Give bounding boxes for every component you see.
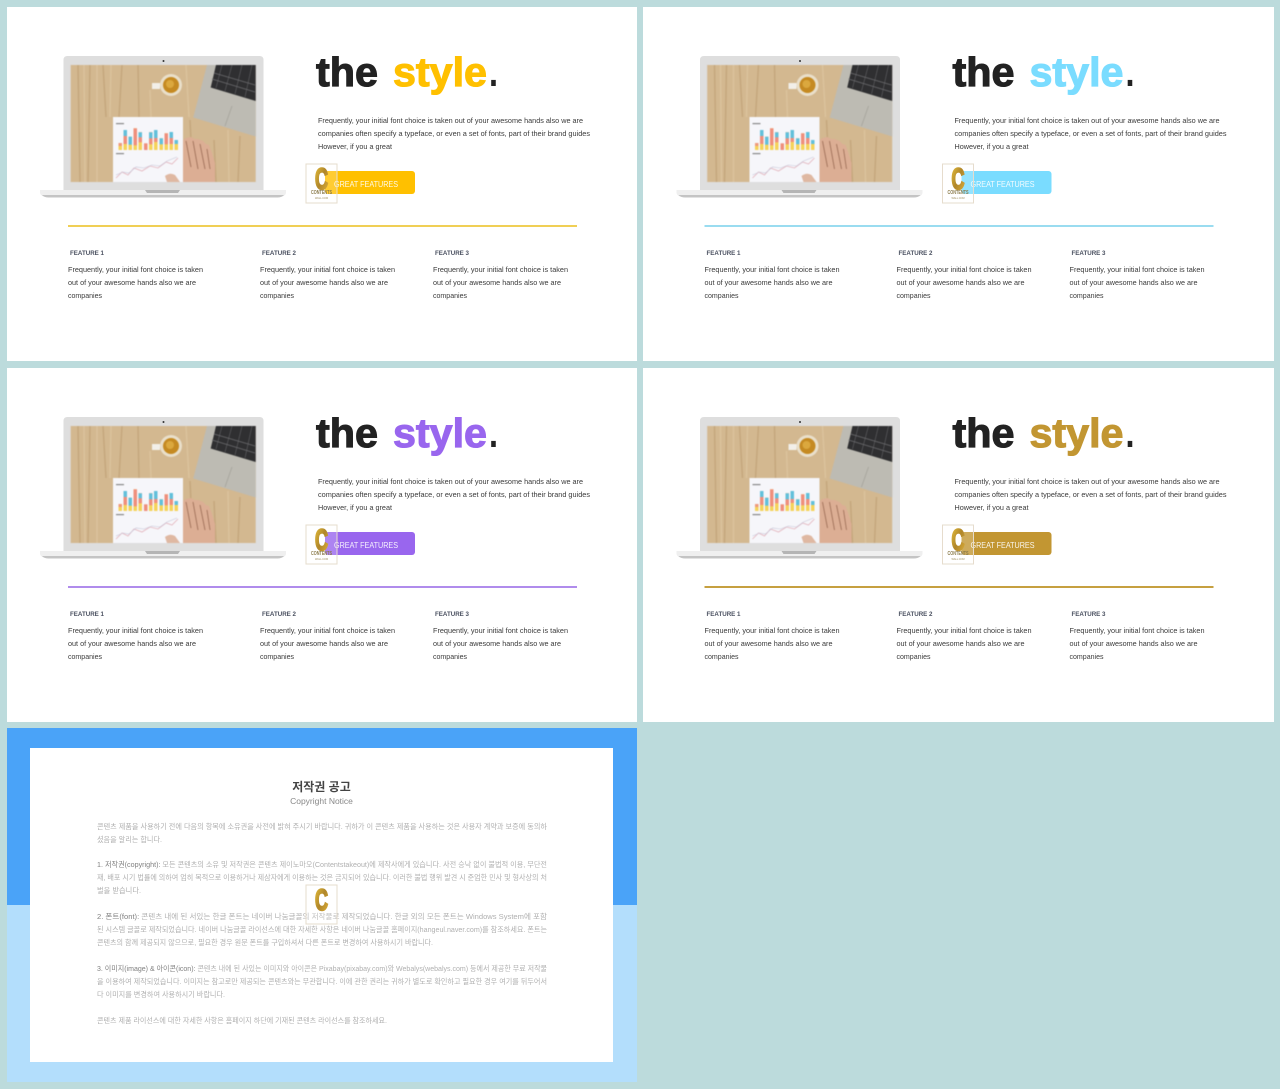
watermark logo [942,163,974,203]
laptop mockup with desk photo [40,417,286,558]
feature 3 [1070,611,1204,661]
paragraph 3: image and icon: 다 이미지를 변경하여 사용하시기 바랍니다. [97,989,225,999]
feature 2: FEATURE 2 [898,611,933,618]
watermark logo: CONTENTS [948,551,969,557]
intro text: Frequently, your initial font choice is taken out of your awesome hands also we are [318,477,583,486]
paragraph 1: copyright: 1. 저작권(copyright): 모든 콘텐츠의 소유 및 저작권은 콘텐츠 제이노마오(Contentstakeout)에 제작사에게 있습니다. 사전 승낙 없이 불법적 이용, 무단전 [97,859,547,869]
feature 3: out of your awesome hands also we are [1070,639,1198,648]
watermark logo: C [315,163,328,196]
watermark logo: WALL.COM [952,196,965,200]
panel: yellow slide [7,7,637,361]
watermark logo: WALL.COM [315,557,328,561]
feature 2 [896,611,1032,661]
feature 3: Frequently, your initial font choice is taken [1070,626,1204,635]
panel: sky blue slide [643,7,1274,361]
title: . [489,410,498,456]
paragraph 1: copyright: 재, 배포 시기 법률에 의하여 엄히 목적으로 이용하거나 제삼자에게 이용하는 것은 금지되어 있습니다. 이러한 불법 행위 발견 시 준엄한 민사 및 형사상의 처 [97,872,547,882]
watermark logo: CONTENTS [311,190,332,196]
feature 2: companies [260,291,294,300]
laptop mockup with desk photo [676,56,922,198]
feature 1: out of your awesome hands also we are [704,639,832,648]
feature 1: FEATURE 1 [706,611,741,618]
feature 2: out of your awesome hands also we are [896,639,1024,648]
feature 2: out of your awesome hands also we are [260,278,388,287]
intro text: However, if you a great [318,142,392,151]
button: great features: GREAT FEATURES [334,541,398,550]
feature 1: Frequently, your initial font choice is taken [68,626,203,635]
laptop mockup with desk photo [676,417,922,558]
title: style [1030,49,1124,95]
feature 3: FEATURE 3 [435,611,469,618]
watermark logo [942,524,974,564]
paragraph 2: font: 콘텐츠의 함께 제공되지 않으므로, 필요한 경우 원문 폰트를 구입하셔서 다른 폰트로 변경하여 사용하시기 바랍니다. [97,937,433,947]
feature 2: out of your awesome hands also we are [260,639,388,648]
button: great features [962,532,1052,555]
heading: copyright notice [290,779,353,806]
intro text: However, if you a great [318,503,392,512]
feature 3: companies [433,652,467,661]
title: style [393,49,487,95]
title: style [393,410,487,456]
feature 1: out of your awesome hands also we are [704,278,832,287]
feature 3: Frequently, your initial font choice is taken [433,626,568,635]
feature 1 [68,250,203,300]
feature 1: companies [704,291,739,300]
intro text: companies often specify a typeface, or even a set of fonts, part of their brand guides [318,129,590,138]
intro text: However, if you a great [954,503,1028,512]
paragraph 3: image and icon: 3. 이미지(image) & 아이콘(icon): 콘텐츠 내에 된 사있는 이미지와 아이콘은 Pixabay(pixabay.com)와 Webalys(webalys.com) 등에서 제공한 무료 저작물 [97,963,547,973]
feature 3: FEATURE 3 [435,250,469,257]
intro text: Frequently, your initial font choice is taken out of your awesome hands also we are [954,477,1220,486]
feature 3: out of your awesome hands also we are [1070,278,1198,287]
feature 3: companies [1070,291,1104,300]
intro text: Frequently, your initial font choice is taken out of your awesome hands also we are [954,116,1220,125]
paragraph 1: copyright: 벌을 받습니다. [97,885,141,895]
button: great features [962,171,1052,194]
feature 2 [260,250,395,300]
feature 2 [260,611,395,661]
laptop mockup with desk photo [40,56,286,198]
title: the [952,410,1014,456]
feature 1: companies [704,652,739,661]
heading: copyright notice: 저작권 공고 [292,779,351,794]
intro paragraph [97,821,547,844]
button: great features [325,532,415,555]
feature 3 [1070,250,1204,300]
feature 2: FEATURE 2 [898,250,933,257]
intro text: Frequently, your initial font choice is taken out of your awesome hands also we are [318,116,583,125]
feature 1: Frequently, your initial font choice is taken [68,265,203,274]
heading: copyright notice: Copyright Notice [290,796,353,806]
feature 3: companies [433,291,467,300]
feature 1 [704,611,840,661]
title [952,49,1134,95]
title: the [952,49,1014,95]
feature 1 [704,250,840,300]
paragraph 3: image and icon: 을 이용하여 제작되었습니다. 이미지는 참고로만 제공되는 콘텐츠와는 무관합니다. 이에 관한 권리는 귀하가 별도로 확인하고 필요한 경우 여기를 뒤두어서 [97,976,547,986]
title [952,410,1134,456]
intro text: companies often specify a typeface, or even a set of fonts, part of their brand guides [954,490,1227,499]
feature 2: out of your awesome hands also we are [896,278,1024,287]
feature 1: out of your awesome hands also we are [68,639,196,648]
feature 2: FEATURE 2 [262,250,296,257]
feature 2: Frequently, your initial font choice is taken [260,265,395,274]
watermark logo [306,163,337,203]
feature 2: FEATURE 2 [262,611,296,618]
feature 3: out of your awesome hands also we are [433,278,561,287]
feature 1: FEATURE 1 [70,250,104,257]
paragraph 2: font: 2. 폰트(font): 콘텐츠 내에 된 서있는 한글 폰트는 네이버 나눔글꼴의 저작물로 제작되었습니다. 한글 외의 모든 폰트는 Windows System에 포함 [97,911,547,921]
intro text: companies often specify a typeface, or even a set of fonts, part of their brand guides [954,129,1227,138]
feature 2: Frequently, your initial font choice is taken [260,626,395,635]
feature 3: out of your awesome hands also we are [433,639,561,648]
button: great features: GREAT FEATURES [970,541,1035,550]
feature 3: companies [1070,652,1104,661]
feature 1: FEATURE 1 [70,611,104,618]
title: . [1126,49,1134,95]
feature 3 [433,611,568,661]
intro paragraph: 콘텐츠 제품을 사용하기 전에 다음의 항목에 소유권을 사전에 밝혀 주시기 바랍니다. 귀하가 이 콘텐츠 제품을 사용하는 것은 사용자 계약과 보증에 동의하 [97,821,547,831]
feature 1: Frequently, your initial font choice is taken [704,626,840,635]
feature 2: Frequently, your initial font choice is taken [896,626,1032,635]
feature 2: Frequently, your initial font choice is taken [896,265,1032,274]
panel: purple slide [7,368,637,722]
intro text [318,477,590,512]
paragraph 3: image and icon [97,963,547,999]
title: . [489,49,498,95]
closing line: 콘텐츠 제품 라이선스에 대한 자세한 사항은 홈페이지 하단에 기재된 콘텐츠 라이선스를 참조하세요. [97,1015,387,1025]
title: the [316,410,378,456]
watermark logo: C [952,163,964,196]
feature 1: out of your awesome hands also we are [68,278,196,287]
feature 1: FEATURE 1 [706,250,741,257]
title [316,410,498,456]
watermark logo: WALL.COM [952,557,965,561]
watermark logo: C [315,524,328,557]
panel: copyright notice [7,728,637,1082]
watermark logo: C [952,524,964,557]
intro text: However, if you a great [954,142,1028,151]
watermark logo [306,884,337,924]
intro paragraph: 셨음을 알리는 합니다. [97,834,162,844]
feature 3: FEATURE 3 [1072,611,1106,618]
feature 2 [896,250,1032,300]
watermark logo: CONTENTS [948,190,969,196]
button: great features: GREAT FEATURES [334,180,398,189]
button: great features: GREAT FEATURES [970,180,1035,189]
paragraph 1: copyright [97,859,547,895]
feature 1: Frequently, your initial font choice is taken [704,265,840,274]
feature 3: FEATURE 3 [1072,250,1106,257]
watermark logo: WALL.COM [315,196,328,200]
title: style [1030,410,1124,456]
title: . [1126,410,1134,456]
feature 3 [433,250,568,300]
title: the [316,49,378,95]
feature 2: companies [260,652,294,661]
title [316,49,498,95]
feature 2: companies [896,291,931,300]
button: great features [325,171,415,194]
paragraph 2: font [97,911,547,947]
intro text: companies often specify a typeface, or even a set of fonts, part of their brand guides [318,490,590,499]
watermark logo [306,524,337,564]
feature 1 [68,611,203,661]
feature 3: Frequently, your initial font choice is taken [1070,265,1204,274]
feature 1: companies [68,652,102,661]
feature 3: Frequently, your initial font choice is taken [433,265,568,274]
feature 1: companies [68,291,102,300]
feature 2: companies [896,652,931,661]
watermark logo: CONTENTS [311,551,332,557]
panel: gold slide [643,368,1274,722]
intro text [954,116,1227,151]
paragraph 2: font: 된 시스템 글꼴로 제작되었습니다. 네이버 나눔글꼴 라이선스에 대한 자세한 사항은 네이버 나눔글꼴 홈페이지(hangeul.naver.com)를 참조하세요. 폰트는 [97,924,547,934]
watermark logo: C [315,884,328,917]
intro text [954,477,1227,512]
intro text [318,116,590,151]
